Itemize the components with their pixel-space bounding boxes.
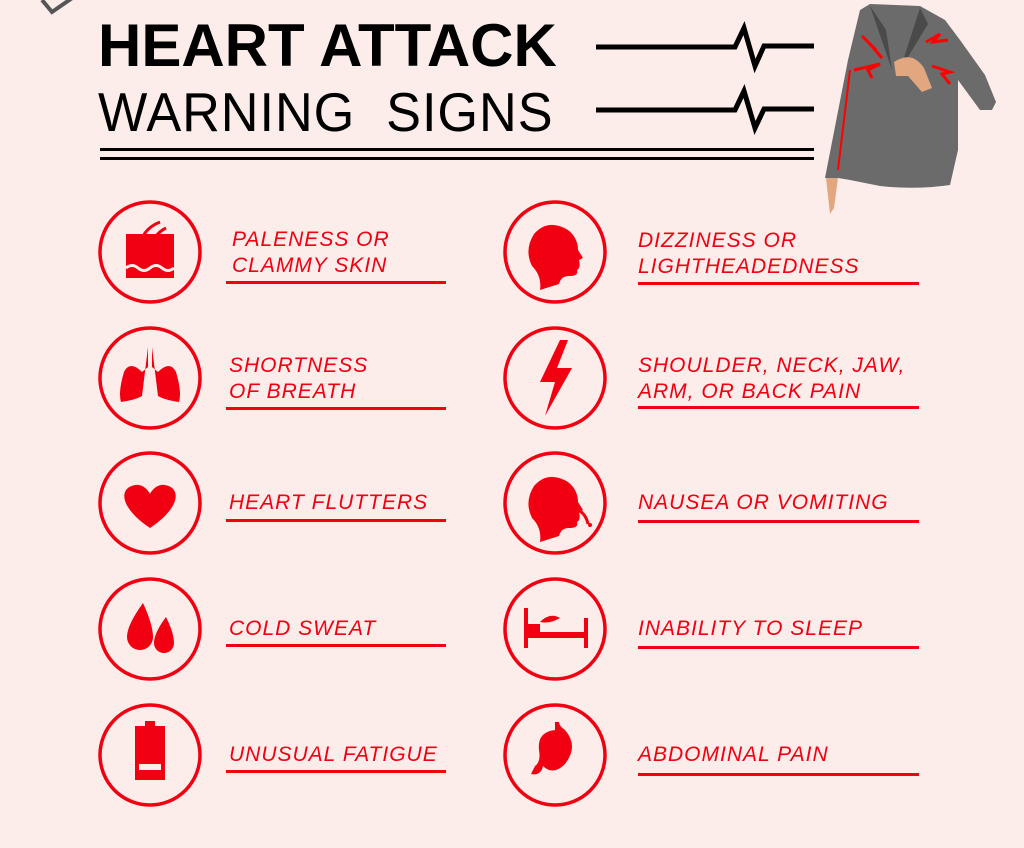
icon: lungs — [120, 347, 180, 402]
icon: head — [528, 225, 583, 290]
label: dizziness: DIZZINESS OR — [638, 229, 797, 252]
label: breath — [229, 354, 368, 403]
label: breath: SHORTNESS — [229, 354, 368, 377]
label: paleness: CLAMMY SKIN — [232, 254, 387, 277]
icon: heart — [124, 485, 176, 528]
label: pain: SHOULDER, NECK, JAW, — [638, 354, 905, 377]
icon: bed — [524, 608, 588, 648]
label: heart: HEART FLUTTERS — [229, 491, 428, 514]
title — [98, 12, 557, 143]
label: sweat: COLD SWEAT — [229, 617, 376, 640]
label: paleness: PALENESS OR — [232, 228, 390, 251]
icon: battery — [135, 721, 165, 780]
icon: stomach — [531, 722, 572, 774]
label: dizziness: LIGHTHEADEDNESS — [638, 255, 860, 278]
label: sleep: INABILITY TO SLEEP — [638, 617, 863, 640]
label: dizziness — [638, 229, 860, 278]
icon: lightning — [540, 340, 572, 416]
title: WARNING SIGNS — [98, 81, 554, 143]
heartbeat lines — [100, 21, 814, 160]
decorative corner icon — [40, 0, 73, 15]
label: pain: ARM, OR BACK PAIN — [638, 380, 861, 403]
label: breath: OF BREATH — [229, 380, 356, 403]
icon: drops — [127, 603, 174, 653]
label: abdominal: ABDOMINAL PAIN — [638, 743, 829, 766]
label: paleness — [232, 228, 390, 277]
label: pain — [637, 354, 905, 403]
icon: vomiting head — [528, 477, 592, 542]
label: nausea: NAUSEA OR VOMITING — [638, 491, 889, 514]
title: HEART ATTACK — [98, 12, 557, 79]
icon: skin — [126, 222, 174, 278]
illustration: woman with chest pain — [825, 4, 996, 214]
label: fatigue: UNUSUAL FATIGUE — [229, 743, 438, 766]
